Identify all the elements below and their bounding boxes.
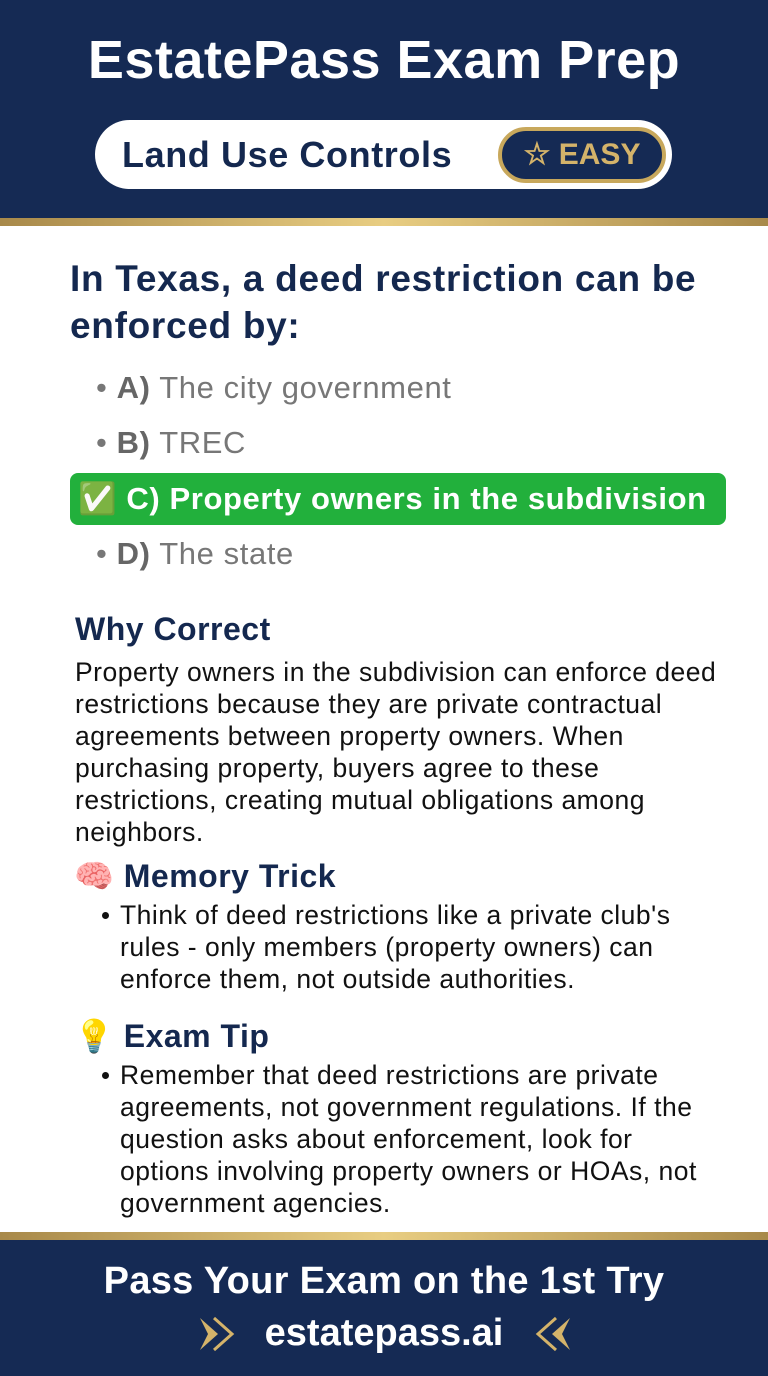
exam tip text: agreements, not government regulations. If the: [120, 1092, 692, 1122]
option B: • B) TREC: [96, 425, 246, 460]
icon: left chevrons: [536, 1317, 570, 1351]
memory trick text: Think of deed restrictions like a private club's: [120, 900, 670, 930]
header: [0, 0, 768, 218]
exam tip text: Remember that deed restrictions are private: [120, 1060, 658, 1090]
why correct text: restrictions because they are private contractual: [75, 689, 662, 719]
option D: • D) The state: [96, 536, 294, 571]
title: EstatePass Exam Prep: [88, 30, 680, 90]
option A: • A) The city government: [96, 370, 452, 405]
topic text: Land Use Controls: [122, 134, 452, 175]
question: In Texas, a deed restriction can be: [70, 258, 696, 299]
why correct text: restrictions, creating mutual obligations among: [75, 785, 645, 815]
why correct text: agreements between property owners. When: [75, 721, 624, 751]
icon: right chevrons: [200, 1317, 234, 1351]
difficulty badge: ☆ EASY: [524, 138, 640, 171]
exam tip text: [102, 1060, 697, 1218]
footer tagline: Pass Your Exam on the 1st Try: [104, 1260, 664, 1302]
footer: [0, 1240, 768, 1376]
option C correct: ✅ C) Property owners in the subdivision: [78, 481, 707, 516]
memory trick text: [102, 900, 670, 994]
why correct text: Property owners in the subdivision can enforce deed: [75, 657, 716, 687]
exam tip text: government agencies.: [120, 1188, 391, 1218]
exam tip heading: 💡 Exam Tip: [74, 1018, 269, 1054]
option C correct: [70, 473, 726, 525]
why correct text: [75, 657, 716, 847]
memory trick text: enforce them, not outside authorities.: [120, 964, 575, 994]
question: [70, 258, 696, 346]
exam tip text: question asks about enforcement, look for: [120, 1124, 633, 1154]
why correct text: neighbors.: [75, 817, 204, 847]
question: enforced by:: [70, 305, 300, 346]
topic pill: [95, 120, 672, 189]
exam tip text: options involving property owners or HOAs, not: [120, 1156, 697, 1186]
difficulty badge: [498, 127, 666, 183]
why correct text: purchasing property, buyers agree to these: [75, 753, 599, 783]
memory trick text: rules - only members (property owners) can: [120, 932, 654, 962]
why correct heading: Why Correct: [75, 611, 271, 647]
footer url: estatepass.ai: [265, 1312, 503, 1354]
memory trick heading: 🧠 Memory Trick: [74, 858, 336, 894]
